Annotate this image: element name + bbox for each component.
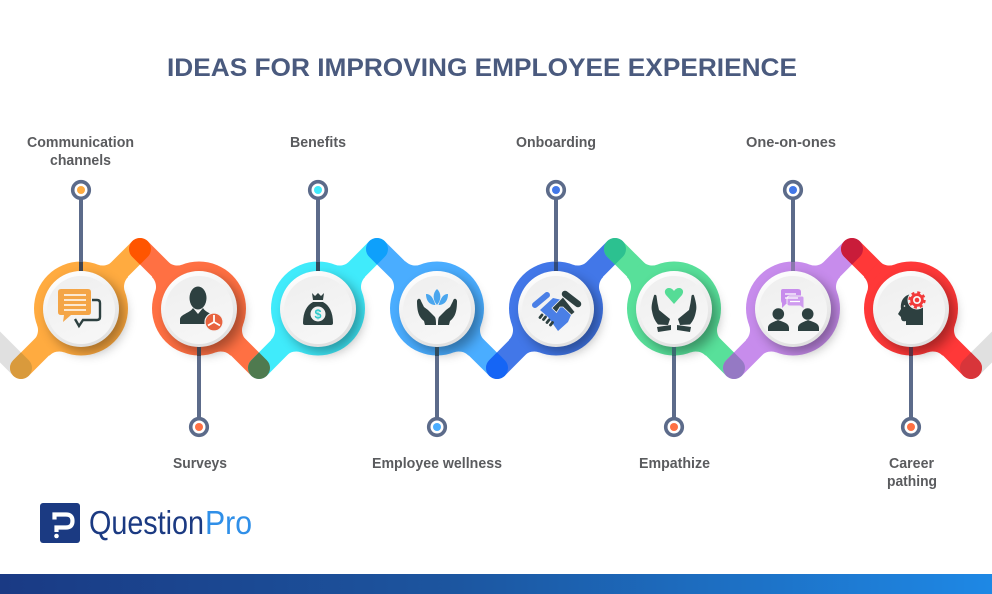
ribbon overlap <box>129 238 151 265</box>
pin <box>73 182 89 198</box>
step: communication channels <box>10 135 140 379</box>
ribbon segment <box>21 249 140 368</box>
connector <box>435 347 439 419</box>
step: employee wellness <box>366 238 502 472</box>
grey ribbon stub left <box>0 327 21 368</box>
connector <box>316 198 320 271</box>
label: Communication <box>27 135 134 151</box>
ribbon overlap <box>960 352 982 379</box>
icon: head with gear <box>898 290 926 325</box>
label: Career <box>889 456 934 472</box>
label: Employee wellness <box>372 456 502 472</box>
logo mark <box>40 503 80 543</box>
connector <box>79 198 83 271</box>
step: onboarding <box>486 135 615 379</box>
pin <box>548 182 564 198</box>
label: Empathize <box>639 456 710 472</box>
ribbon segment <box>615 249 734 368</box>
pin <box>310 182 326 198</box>
ribbon overlap <box>486 352 508 379</box>
ribbon segment <box>852 249 971 368</box>
pin <box>903 419 919 435</box>
grey ribbon stub right <box>971 327 992 368</box>
ribbon overlap <box>723 352 745 379</box>
label: channels <box>50 153 111 169</box>
disc <box>518 271 600 353</box>
label: Surveys <box>173 456 227 472</box>
pin <box>666 419 682 435</box>
icon: person with pie chart <box>180 286 223 331</box>
label: Benefits <box>290 135 346 151</box>
label: One-on-ones <box>746 135 836 151</box>
icon: lotus in hands <box>417 289 457 325</box>
step: career pathing <box>841 238 982 490</box>
ribbon segment <box>734 249 852 368</box>
icon: handshake <box>535 294 578 331</box>
ribbon segment <box>377 249 497 368</box>
connector <box>554 198 558 271</box>
disc <box>43 271 125 353</box>
ribbon overlap <box>366 238 388 265</box>
title: IDEAS FOR IMPROVING EMPLOYEE EXPERIENCE <box>167 54 797 82</box>
step: benefits <box>248 135 377 379</box>
connector <box>197 347 201 419</box>
step: one-on-ones <box>723 135 852 379</box>
ribbon overlap <box>10 352 32 379</box>
disc <box>280 271 362 353</box>
label: pathing <box>887 474 937 490</box>
step: empathize <box>604 238 734 472</box>
icon: money bag: $ <box>315 308 322 322</box>
label: Onboarding <box>516 135 596 151</box>
icon: money bag <box>303 293 333 325</box>
disc <box>755 271 837 353</box>
pin <box>785 182 801 198</box>
disc <box>636 271 718 353</box>
ribbon segment <box>259 249 377 368</box>
ribbon overlap <box>248 352 270 379</box>
disc <box>873 271 955 353</box>
ribbon segment <box>140 249 259 368</box>
ribbon segment <box>497 249 615 368</box>
pin <box>191 419 207 435</box>
connector <box>672 347 676 419</box>
ribbon overlap <box>841 238 863 265</box>
logo: QuestionPro <box>40 503 252 543</box>
disc <box>399 271 481 353</box>
ribbon overlap <box>604 238 626 265</box>
logo wordmark: Question <box>89 504 204 541</box>
disc <box>161 271 243 353</box>
icon: heart in hands <box>652 288 696 332</box>
pin <box>429 419 445 435</box>
icon: speech bubbles <box>58 289 100 326</box>
footer bar <box>0 574 992 594</box>
step: surveys <box>129 238 259 472</box>
connector <box>791 198 795 271</box>
connector <box>909 347 913 419</box>
logo wordmark: Pro <box>205 504 252 541</box>
icon: two people talking <box>768 289 819 331</box>
